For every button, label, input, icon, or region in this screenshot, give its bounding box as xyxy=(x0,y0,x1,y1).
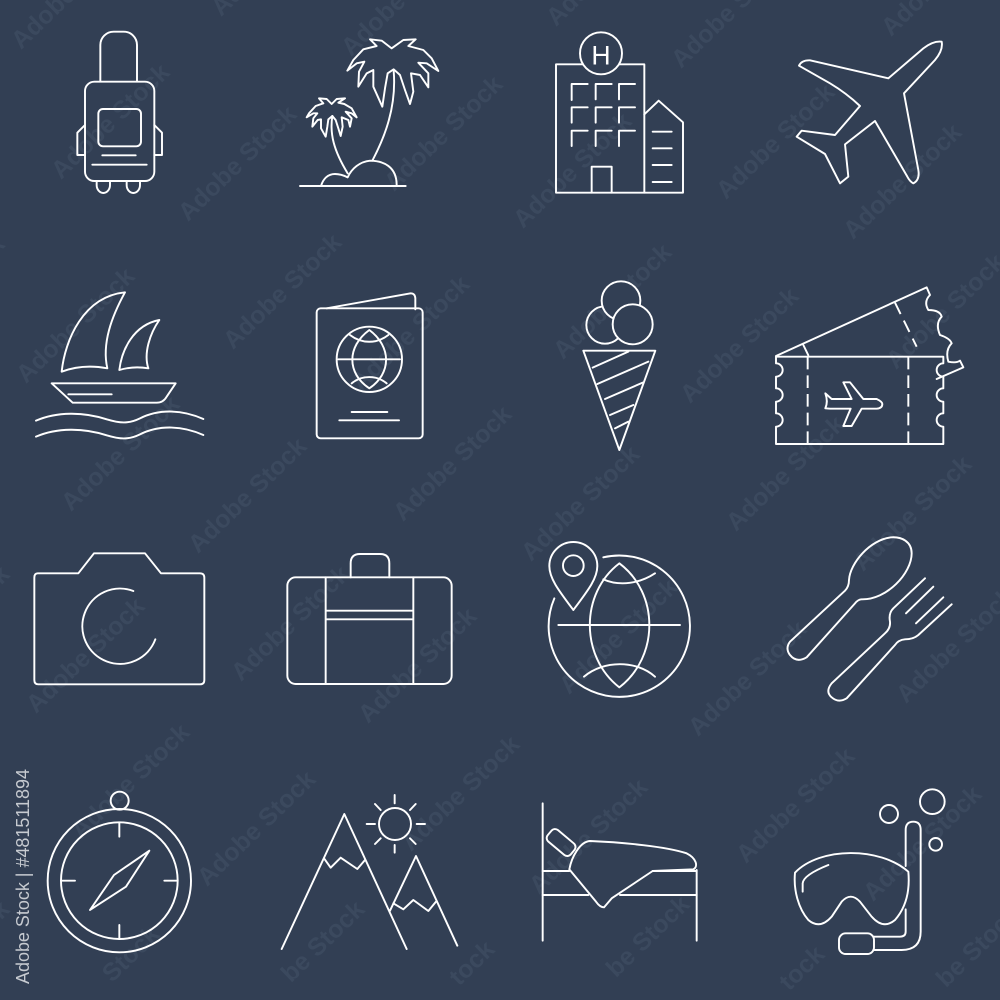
watermark pattern: Adobe Stock xyxy=(548,238,677,364)
icon: globe with location pin xyxy=(549,542,690,697)
watermark pattern: Adobe Stock xyxy=(524,773,653,899)
watermark pattern: Adobe Stock xyxy=(11,262,140,388)
watermark pattern: Adobe Stock xyxy=(711,78,840,204)
icon: spoon and fork xyxy=(787,537,952,701)
icon: hotel: H xyxy=(591,41,611,71)
icon: compass xyxy=(48,792,191,952)
watermark pattern: Adobe Stock xyxy=(721,410,850,536)
watermark pattern: Adobe Stock xyxy=(858,780,987,906)
watermark pattern: Adobe Stock xyxy=(396,730,525,856)
watermark pattern: Adobe Stock xyxy=(21,592,150,718)
watermark pattern: Adobe Stock xyxy=(192,765,321,891)
icon: passport xyxy=(317,293,423,438)
icon: camera xyxy=(34,553,204,684)
watermark pattern: Adobe Stock xyxy=(675,282,804,408)
watermark pattern: Adobe Stock xyxy=(66,718,195,844)
watermark pattern: Adobe Stock xyxy=(838,118,967,244)
watermark pattern: Adobe Stock xyxy=(731,742,860,868)
icon: mountains and sun xyxy=(282,795,457,949)
icon: rolling suitcase xyxy=(77,32,162,193)
watermark pattern: Adobe Stock xyxy=(183,432,312,558)
watermark pattern: be Stock xyxy=(276,895,370,988)
watermark pattern: be Stock xyxy=(601,890,695,983)
stock id caption: Adobe Stock | #481511894 xyxy=(13,769,33,984)
icon: travel bag xyxy=(287,554,452,684)
watermark pattern: Adobe Stock xyxy=(508,107,637,233)
icon: bed xyxy=(543,803,697,941)
watermark pattern: Adobe Stock xyxy=(683,615,812,741)
watermark pattern: Adobe Stock xyxy=(388,400,517,526)
watermark pattern: Stock xyxy=(97,920,165,988)
watermark pattern: Adobe Stock xyxy=(226,560,355,686)
watermark pattern: Adobe Stock xyxy=(56,390,185,516)
watermark pattern: Adobe Stock xyxy=(516,440,645,566)
watermark pattern: Adobe Stock xyxy=(46,58,175,184)
watermark pattern: Adobe Stock xyxy=(346,270,475,396)
watermark pattern: Adobe Stock xyxy=(554,573,683,699)
icon: palm island xyxy=(300,39,438,186)
watermark pattern: Adobe Stock xyxy=(848,450,977,576)
watermark pattern: Adobe Stock xyxy=(218,228,347,354)
icon: snorkel mask xyxy=(795,789,945,954)
icon: sailboat xyxy=(36,292,203,438)
watermark pattern: Adobe Stock xyxy=(379,70,508,196)
watermark pattern: Adobe Stock xyxy=(353,602,482,728)
icon: hotel xyxy=(556,32,683,193)
icon: plane tickets xyxy=(776,287,963,444)
watermark pattern: tock xyxy=(444,935,500,991)
watermark pattern: Adobe Stock xyxy=(173,100,302,226)
watermark pattern: tock xyxy=(774,940,830,996)
icon: ice cream cone xyxy=(583,281,655,450)
icon: airplane xyxy=(797,42,942,183)
